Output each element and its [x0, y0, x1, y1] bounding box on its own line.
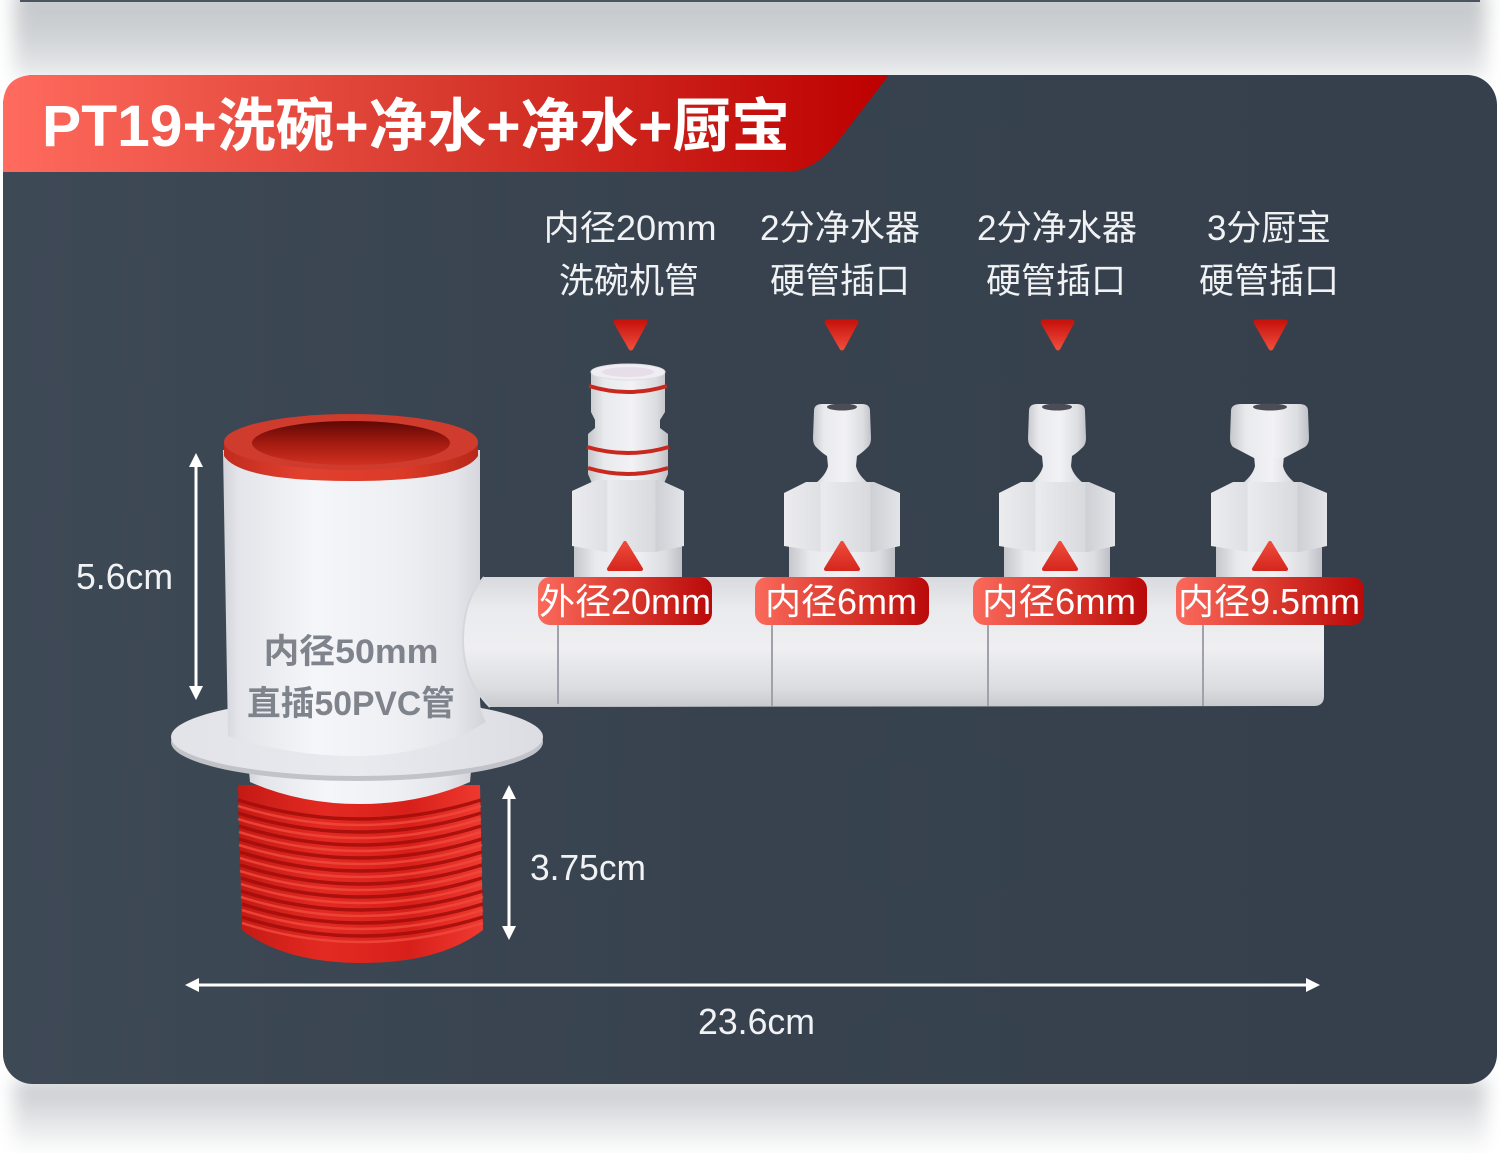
label: purifier port 2: 2分净水器: [977, 209, 1137, 248]
previous panel edge: [20, 0, 1480, 2]
badge: inner 9.5mm: 内径9.5mm: [1178, 581, 1360, 622]
label: kitchen heater port: 3分厨宝: [1207, 209, 1331, 248]
fitting: purifier connector 2: [999, 404, 1115, 580]
rim opening: [252, 421, 450, 465]
main cylinder: [223, 450, 486, 756]
up-pointing markers: [609, 543, 1286, 569]
product: drain adapter body: [171, 414, 543, 963]
bottom shadow band: [14, 1080, 1486, 1152]
text on cylinder: [247, 633, 455, 723]
inner diameter: 内径50mm: [264, 633, 438, 671]
label: dishwasher port line 2: 洗碗机管: [559, 262, 699, 301]
kitchen heater port opening: [1253, 404, 1287, 410]
dimension label: 3.75cm: 3.75cm: [530, 847, 646, 888]
threaded section: [238, 785, 483, 963]
dimension arrow: 23.6cm: [185, 978, 1320, 992]
fits PVC: 直插50PVC管: [247, 685, 455, 723]
badge: inner 6mm: 内径6mm: [765, 581, 917, 622]
fitting: kitchen heater connector: [1211, 404, 1327, 580]
dimension arrow: 3.75cm: [502, 785, 516, 940]
label: purifier port 2 line 2: 硬管插口: [986, 262, 1126, 301]
kitchen heater cap: [1230, 404, 1309, 458]
title: PT19+洗碗+净水+净水+厨宝: [42, 94, 790, 159]
manifold pipe: [463, 577, 1324, 707]
base flange: [171, 698, 543, 781]
red top rim: [224, 414, 478, 481]
down-pointing markers: [616, 322, 1285, 348]
top shadow band: [14, 0, 1486, 80]
dimension label: 23.6cm: 23.6cm: [698, 1001, 815, 1042]
badge: outer 20mm: 外径20mm: [539, 581, 711, 622]
label: dishwasher port: 内径20mm: [544, 209, 716, 248]
label: purifier port 1 line 2: 硬管插口: [770, 262, 910, 301]
label: kitchen heater port line 2: 硬管插口: [1199, 262, 1339, 301]
dimension label: 5.6cm: 5.6cm: [76, 556, 173, 597]
header ribbon: [3, 75, 889, 172]
white neck under flange: [248, 760, 472, 804]
badge: inner 6mm second: 内径6mm: [982, 581, 1136, 622]
port labels: [544, 209, 1339, 301]
label: purifier port 1: 2分净水器: [760, 209, 920, 248]
dimension arrow: 5.6cm: [189, 453, 203, 700]
fitting: dishwasher connector: [572, 364, 684, 580]
fitting: purifier connector 1: [784, 404, 900, 580]
